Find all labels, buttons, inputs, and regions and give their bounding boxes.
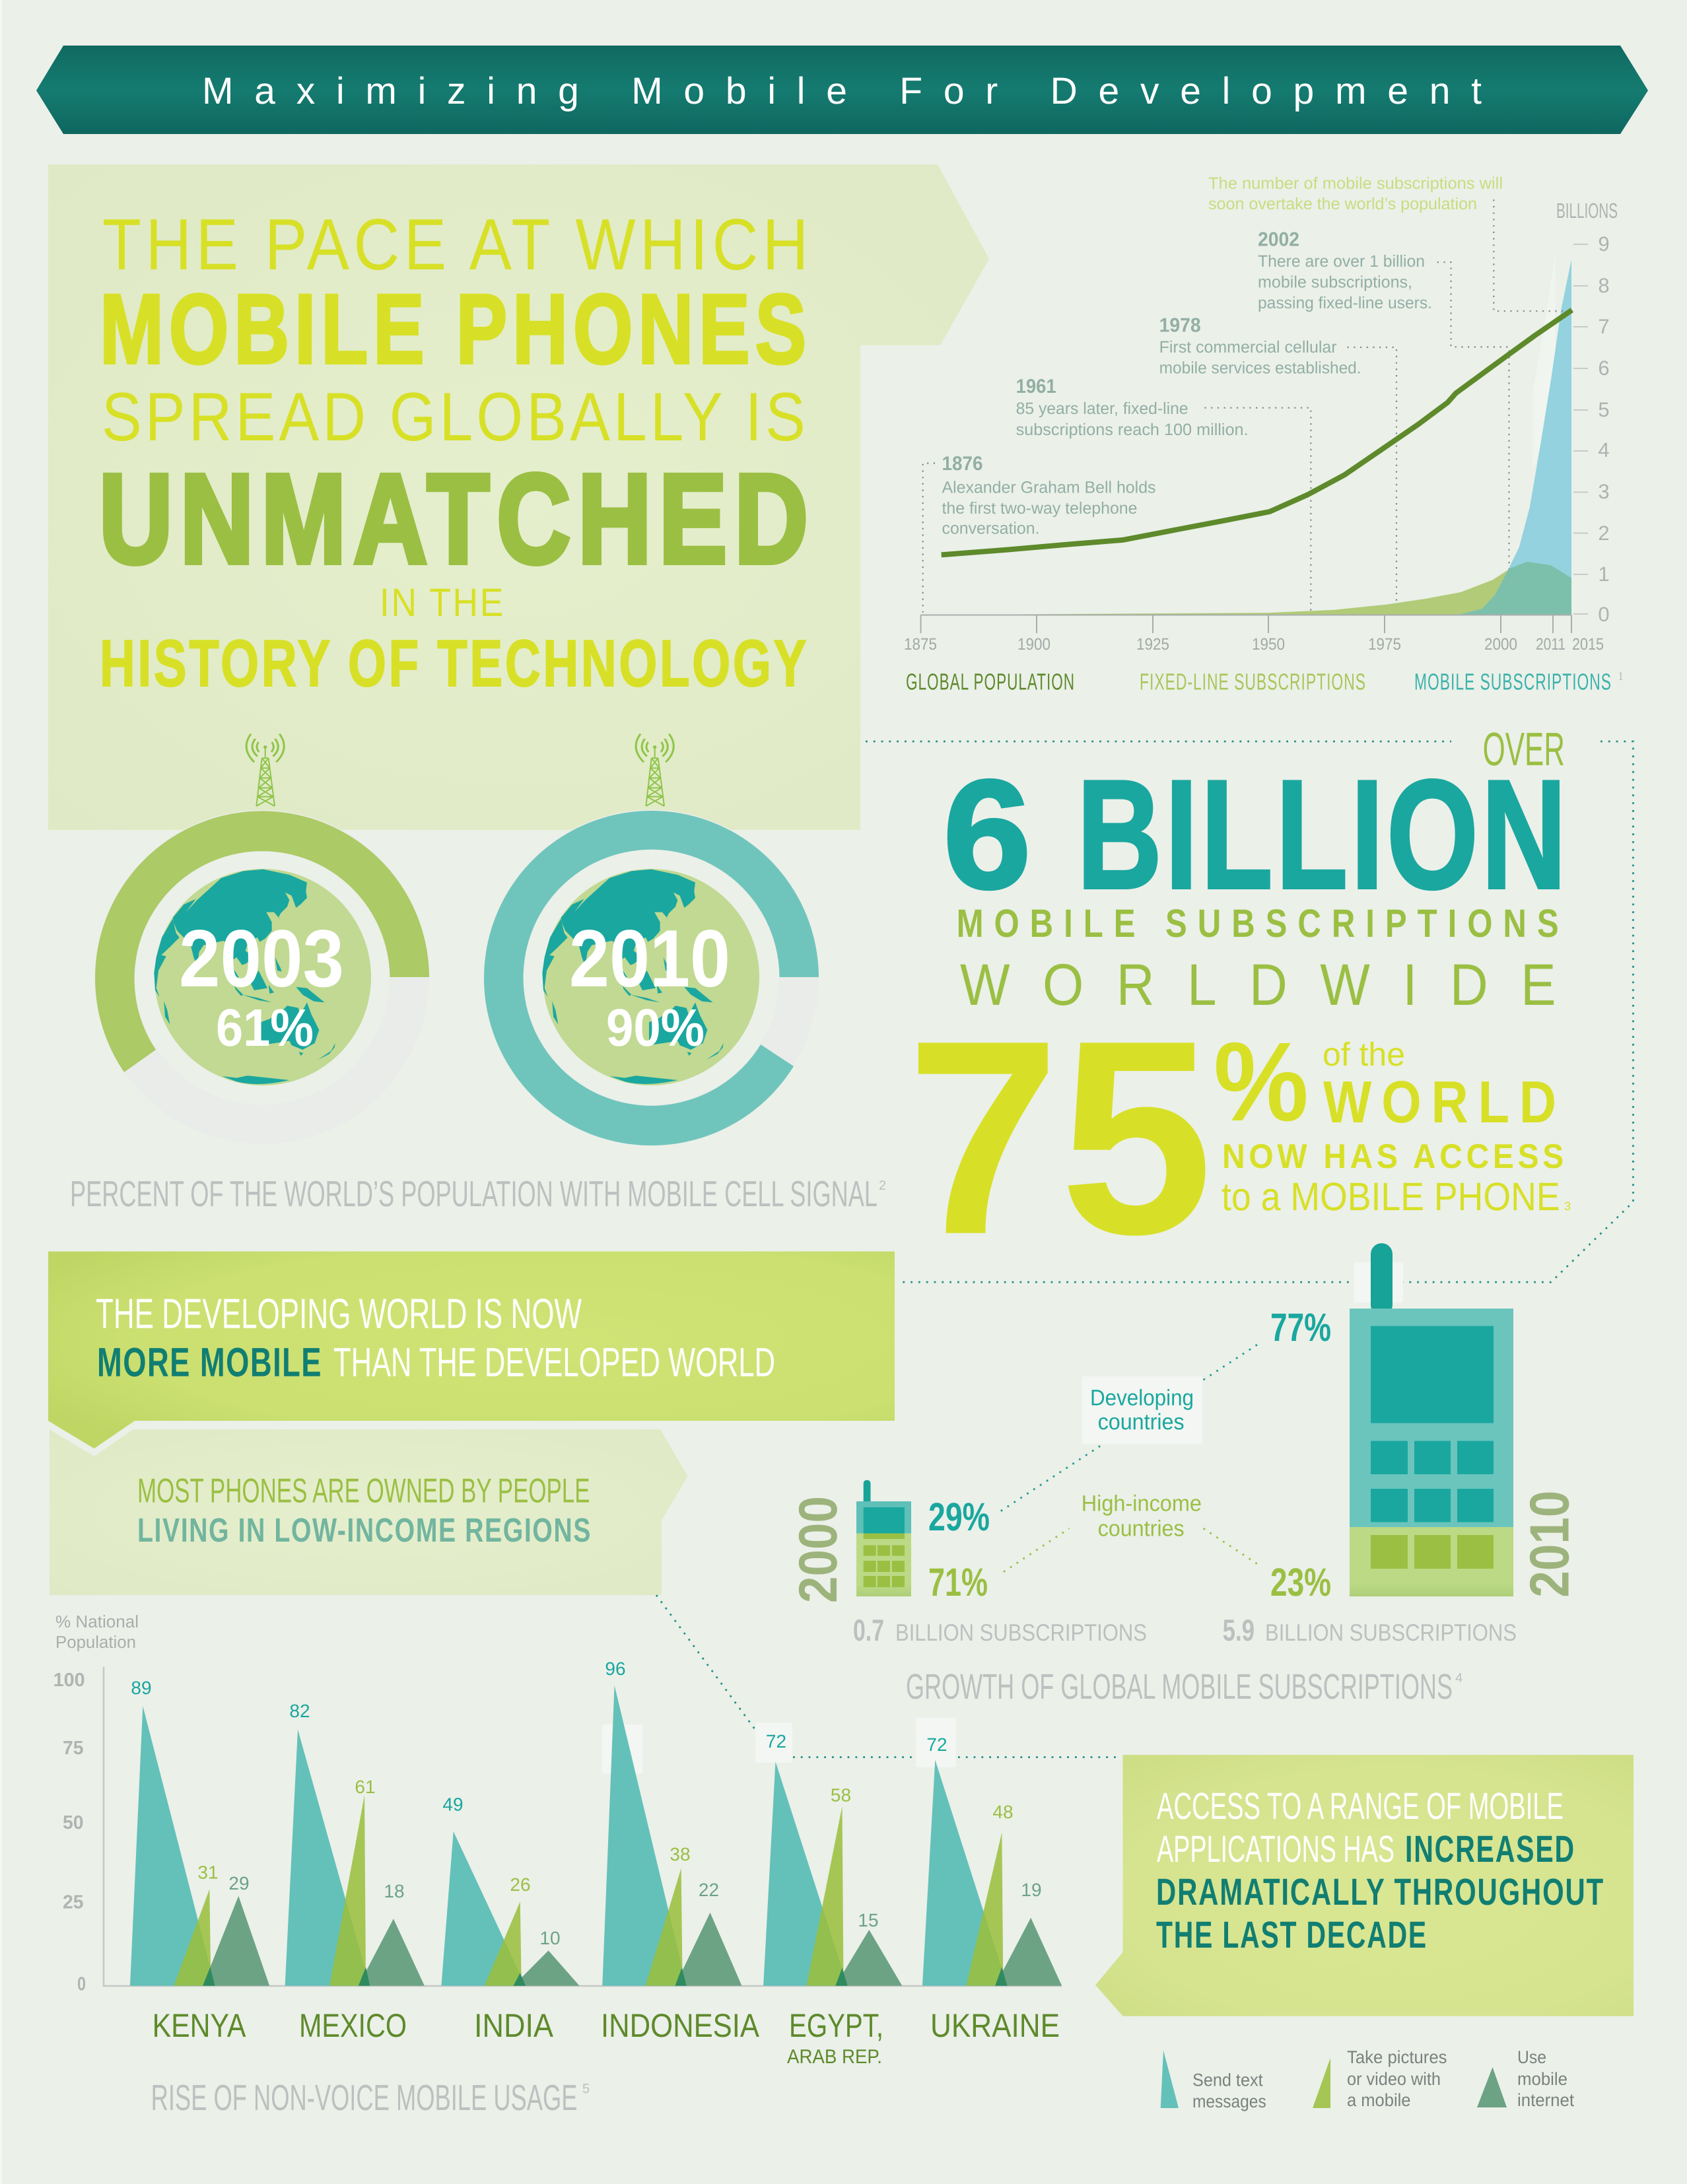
subscriptions totals: BILLION SUBSCRIPTIONS — [1265, 1619, 1517, 1646]
note 1876: Alexander Graham Bell holds — [942, 479, 1155, 497]
y axis labels: 3 — [1598, 480, 1610, 503]
label: high-income countries: countries — [1098, 1516, 1185, 1541]
mobile internet values: 15 — [858, 1910, 879, 1930]
picture and video values: 31 — [197, 1862, 219, 1883]
legend: use mobile internet: Use — [1517, 2047, 1546, 2067]
highlight boxes — [602, 1718, 956, 1773]
note 1978: 1978 — [1159, 314, 1201, 337]
percentages developing — [928, 1305, 1331, 1539]
mobile internet values: 19 — [1021, 1880, 1042, 1900]
legend: send text messages: messages — [1192, 2092, 1266, 2111]
percentages high-income: 23% — [1270, 1560, 1331, 1604]
note 1876: 1876 — [942, 453, 982, 475]
x axis labels: 2011 — [1536, 635, 1566, 654]
x axis labels: 1875 — [904, 635, 937, 654]
note 2002: mobile subscriptions, — [1258, 273, 1412, 292]
mobile internet values: 18 — [384, 1881, 405, 1901]
icon: signal tower — [636, 734, 673, 806]
percentages developing: 29% — [928, 1495, 990, 1539]
mobile internet values: 29 — [228, 1873, 250, 1894]
subscriptions totals: 5.9 — [1223, 1613, 1255, 1647]
chart legend: 1 — [1618, 669, 1624, 683]
label: high-income countries: High-income — [1082, 1491, 1202, 1517]
label: developing countries: Developing — [1090, 1386, 1194, 1411]
legend: take pictures or video: a mobile — [1347, 2090, 1410, 2110]
x axis labels — [904, 635, 1604, 654]
y axis labels: 75 — [63, 1738, 83, 1759]
label: 2010 90%: 90% — [606, 998, 705, 1057]
y axis labels: 0 — [77, 1974, 86, 1995]
country labels — [153, 2007, 1060, 2068]
label: 2003 61%: 2003 — [179, 914, 344, 1004]
panel: low-income regions: LIVING IN LOW-INCOME REGIONS — [137, 1511, 592, 1549]
x axis labels: 2015 — [1572, 635, 1604, 654]
y axis labels: 1 — [1598, 563, 1610, 586]
subscriptions totals: BILLION SUBSCRIPTIONS — [895, 1619, 1147, 1646]
text message values: 72 — [766, 1731, 786, 1752]
y axis labels: 50 — [63, 1812, 83, 1833]
y axis labels: 8 — [1598, 274, 1610, 297]
x axis labels: 2000 — [1484, 635, 1517, 654]
panel: low-income regions — [50, 1429, 688, 1595]
country labels: EGYPT, — [789, 2007, 883, 2044]
panel: access to applications — [1095, 1755, 1634, 2016]
panel: pace headline — [48, 164, 989, 830]
note: mobile overtakes population — [1208, 174, 1503, 213]
text message values — [131, 1658, 947, 1815]
note 1961: subscriptions reach 100 million. — [1016, 421, 1249, 439]
text message values: 82 — [289, 1701, 310, 1721]
panel: more mobile callout: THAN THE DEVELOPED WORLD — [333, 1340, 775, 1385]
panel: pace headline: THE PACE AT WHICH — [102, 204, 813, 285]
legend: take pictures or video: Take pictures — [1347, 2047, 1447, 2067]
y axis labels — [1598, 232, 1610, 626]
mobile internet values: 22 — [699, 1880, 719, 1900]
note 2002: There are over 1 billion — [1258, 252, 1425, 271]
y axis labels: 100 — [53, 1670, 85, 1691]
text message values: 96 — [605, 1658, 626, 1679]
caption: non-voice usage — [151, 2077, 590, 2118]
x axis labels: 1925 — [1136, 635, 1169, 654]
panel: access to applications: THE LAST DECADE — [1156, 1914, 1428, 1956]
legend: send text messages — [1161, 2051, 1266, 2111]
picture and video values: 38 — [670, 1844, 691, 1864]
chart legend — [906, 669, 1624, 695]
note 1961 — [1016, 376, 1249, 439]
label: high-income countries — [1082, 1491, 1202, 1541]
note: mobile overtakes population: The number of mobile subscriptions will — [1208, 174, 1503, 193]
high-income connectors — [1004, 1528, 1261, 1572]
annotation leader lines — [923, 199, 1567, 613]
stat: 75 percent of the world: of the — [1323, 1036, 1405, 1073]
billions unit label: BILLIONS — [1556, 199, 1618, 222]
dotted connector: frame right side — [901, 741, 1634, 1282]
legend: send text messages: Send text — [1192, 2070, 1263, 2090]
label: developing countries — [1082, 1377, 1202, 1444]
caption: growth: 4 — [1455, 1671, 1463, 1686]
note 1978: mobile services established. — [1159, 359, 1361, 378]
stat: 75 percent of the world: WORLD — [1323, 1070, 1566, 1136]
x axis labels: 1950 — [1252, 635, 1285, 654]
label: 2010 90%: 2010 — [569, 914, 730, 1004]
panel: pace headline: MOBILE PHONES — [100, 273, 811, 384]
panel: pace headline: IN THE — [380, 580, 505, 625]
caption: cell signal: 2 — [879, 1178, 886, 1193]
legend: use mobile internet: mobile — [1517, 2069, 1567, 2089]
legend: use mobile internet — [1477, 2047, 1574, 2110]
y axis labels: 7 — [1598, 315, 1610, 338]
chart: non-voice mobile usage — [53, 1612, 1062, 2068]
note 1978 — [1159, 314, 1361, 378]
stat: 75 percent of the world: 75 — [907, 983, 1213, 1292]
panel: more mobile callout: MORE MOBILE — [97, 1340, 322, 1385]
caption: cell signal: PERCENT OF THE WORLD’S POPULATION WITH MOBILE CELL SIGNAL — [70, 1173, 878, 1214]
caption: cell signal — [70, 1173, 886, 1214]
subscriptions totals — [853, 1613, 1517, 1647]
y axis labels: 6 — [1598, 357, 1610, 380]
year label 2010: 2010 — [1519, 1491, 1581, 1598]
y axis labels — [53, 1670, 86, 1995]
stat: 75 percent of the world: % — [1214, 1019, 1309, 1145]
picture and video values — [197, 1777, 1014, 1895]
cell signal: 2003 globe ring — [95, 734, 429, 1124]
stat: 75 percent of the world: 3 — [1564, 1200, 1571, 1213]
chart: subscriptions over time — [904, 174, 1624, 695]
dotted connector: six billion frame — [866, 741, 1451, 742]
icon: signal tower — [246, 734, 284, 806]
note 1876: conversation. — [942, 520, 1039, 538]
note 1876: the first two-way telephone — [942, 499, 1137, 518]
y axis labels: 4 — [1598, 438, 1610, 461]
dotted connector to usage panel — [656, 1595, 1119, 1757]
y axis title — [55, 1612, 139, 1652]
x axis labels: 1975 — [1368, 635, 1401, 654]
percentages developing: 77% — [1270, 1305, 1331, 1349]
panel: more mobile callout — [48, 1252, 895, 1449]
stat: six billion subscriptions — [943, 724, 1589, 1017]
chart legend: FIXED-LINE SUBSCRIPTIONS — [1140, 669, 1366, 695]
text message values: 49 — [442, 1794, 464, 1815]
y axis labels: 25 — [63, 1892, 83, 1913]
global population line — [942, 310, 1572, 555]
mobile internet values: 10 — [539, 1928, 561, 1948]
stat: six billion subscriptions: WORLDWIDE — [960, 951, 1589, 1017]
panel: pace headline: UNMATCHED — [99, 448, 815, 590]
legend: take pictures or video — [1313, 2047, 1447, 2110]
label: 2010 90% — [569, 914, 730, 1057]
stat: 75 percent of the world — [907, 983, 1571, 1292]
icon: globe — [154, 869, 371, 1085]
icon: globe — [542, 869, 759, 1085]
note 1876 — [942, 453, 1155, 538]
subscriptions totals: 0.7 — [853, 1613, 884, 1647]
panel: more mobile callout: THE DEVELOPING WORLD IS NOW — [96, 1290, 582, 1338]
note: mobile overtakes population: soon overtake the world’s population — [1208, 195, 1477, 213]
legend: use mobile internet: internet — [1517, 2090, 1574, 2110]
text message values: 72 — [926, 1734, 947, 1755]
y axis labels: 5 — [1598, 398, 1610, 421]
country labels: ARAB REP. — [787, 2046, 882, 2068]
stat: six billion subscriptions: MOBILE SUBSCRIPTIONS — [957, 901, 1569, 945]
note 1961: 85 years later, fixed-line — [1016, 399, 1188, 418]
year label 2000: 2000 — [788, 1496, 848, 1603]
legend: take pictures or video: or video with — [1347, 2069, 1441, 2089]
area: mobile and fixed-line subscriptions — [920, 256, 1571, 615]
title banner — [36, 46, 1648, 134]
label: developing countries: countries — [1098, 1410, 1185, 1435]
percentages high-income — [928, 1560, 1331, 1604]
x axis labels: 1900 — [1017, 635, 1050, 654]
panel: access to applications: INCREASED — [1405, 1828, 1575, 1870]
axes — [104, 1666, 1062, 1986]
panel: access to applications: APPLICATIONS HAS — [1157, 1828, 1394, 1870]
picture and video values: 26 — [510, 1874, 531, 1895]
mobile internet values — [228, 1873, 1042, 1948]
country labels: KENYA — [153, 2007, 246, 2044]
label: 2003 61%: 61% — [216, 998, 314, 1057]
stat: six billion subscriptions: 6 — [943, 747, 1031, 921]
developing countries connectors — [1001, 1342, 1261, 1511]
chart legend: GLOBAL POPULATION — [906, 669, 1075, 695]
caption: non-voice usage: RISE OF NON-VOICE MOBILE USAGE — [151, 2077, 578, 2118]
y axis title: Population — [55, 1632, 136, 1652]
percentages high-income: 71% — [928, 1560, 988, 1604]
picture and video values: 48 — [992, 1802, 1014, 1822]
axes — [920, 244, 1588, 633]
picture and video values: 61 — [355, 1777, 376, 1797]
phone 2010 — [1350, 1243, 1513, 1596]
label: 2003 61% — [179, 914, 344, 1057]
caption: non-voice usage: 5 — [582, 2082, 590, 2096]
note 1978: First commercial cellular — [1159, 338, 1337, 357]
triangles — [130, 1686, 1062, 1986]
y axis labels: 0 — [1598, 603, 1610, 626]
note 2002: passing fixed-line users. — [1258, 294, 1432, 312]
y axis title: % National — [55, 1612, 139, 1631]
panel: pace headline: HISTORY OF TECHNOLOGY — [100, 627, 809, 700]
y axis labels: 2 — [1598, 522, 1610, 545]
title banner: Maximizing Mobile For Development — [202, 70, 1482, 112]
country labels: MEXICO — [299, 2007, 407, 2044]
country labels: UKRAINE — [930, 2007, 1060, 2044]
phone 2000 — [856, 1480, 911, 1596]
country labels: INDIA — [474, 2007, 554, 2044]
note 1961: 1961 — [1016, 376, 1056, 397]
y axis labels: 9 — [1598, 232, 1610, 256]
picture and video values: 58 — [831, 1785, 851, 1805]
cell signal: 2010 globe ring — [484, 734, 819, 1145]
country labels: INDONESIA — [601, 2007, 760, 2044]
stat: 75 percent of the world: to a MOBILE PHONE — [1222, 1175, 1560, 1219]
stat: six billion subscriptions: OVER — [1483, 724, 1565, 776]
note 2002 — [1258, 228, 1432, 312]
panel: pace headline: SPREAD GLOBALLY IS — [102, 379, 809, 456]
note 2002: 2002 — [1258, 228, 1299, 251]
stat: 75 percent of the world: NOW HAS ACCESS — [1222, 1138, 1567, 1176]
panel: low-income regions: MOST PHONES ARE OWNED BY PEOPLE — [137, 1472, 590, 1511]
text message values: 89 — [131, 1678, 152, 1698]
